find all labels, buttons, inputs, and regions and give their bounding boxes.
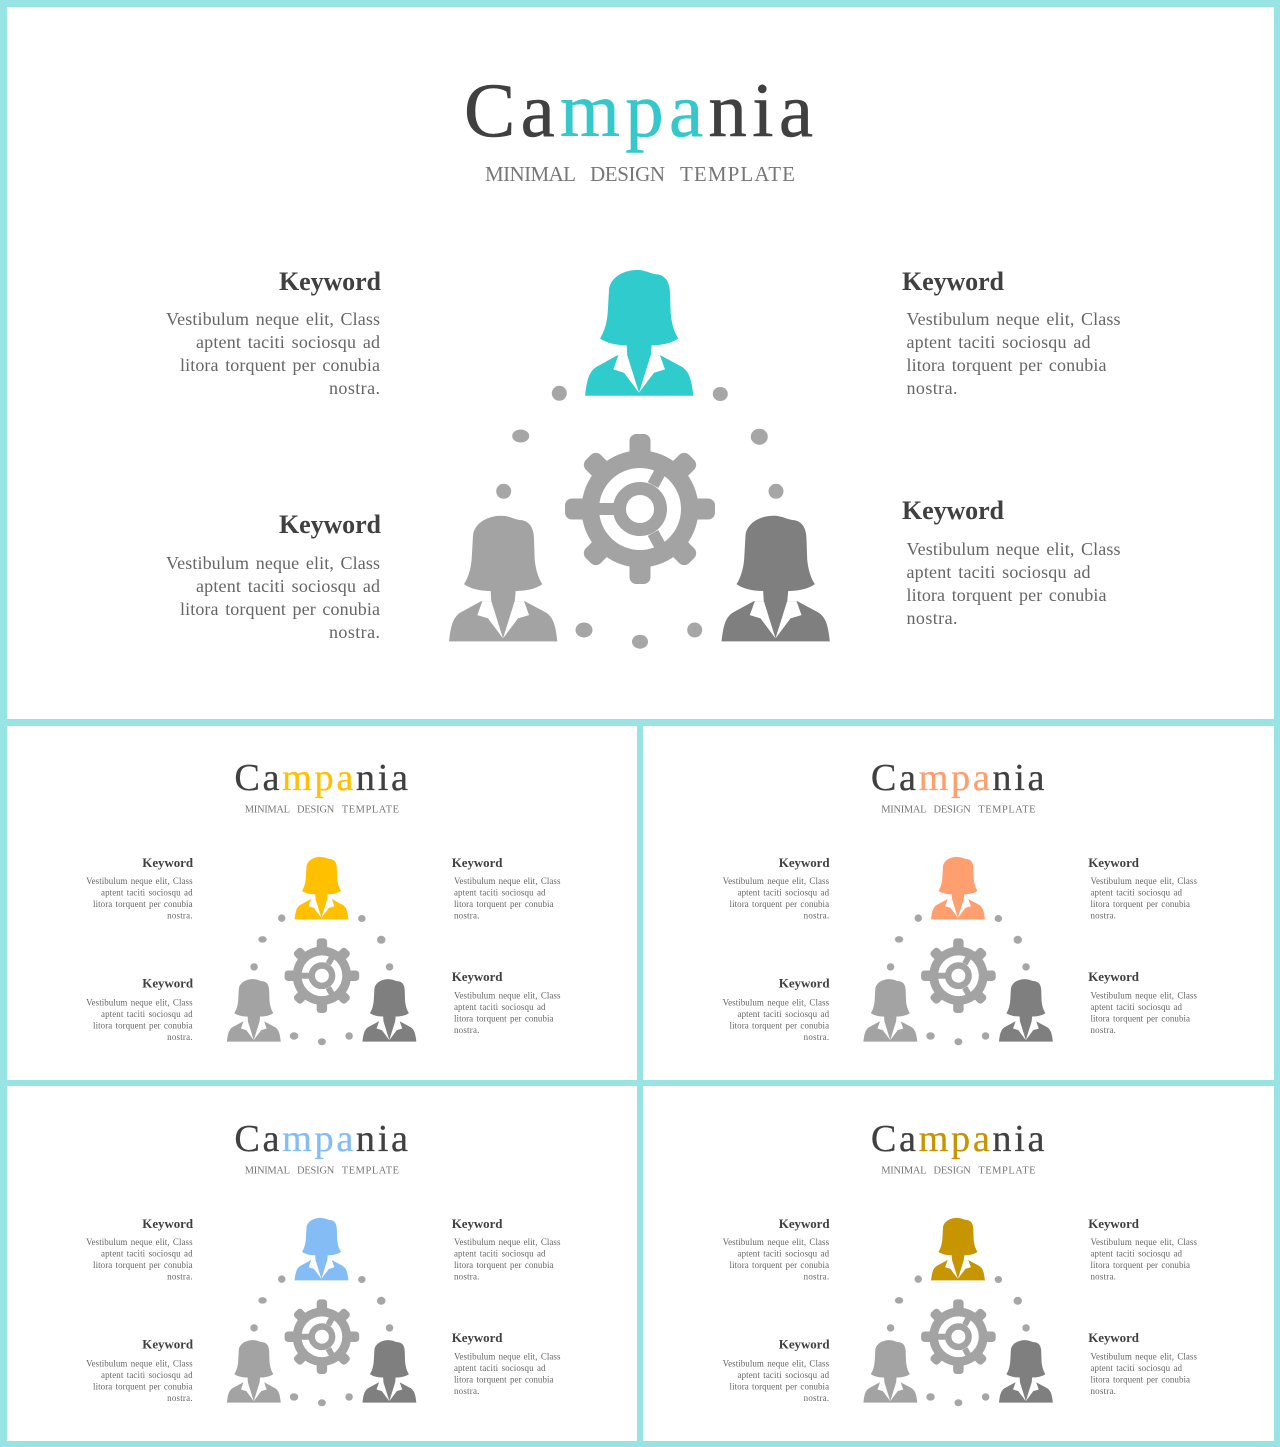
text block: top right: litora torquent per conubia <box>454 1260 554 1270</box>
subtitle: TEMPLATE <box>680 162 795 186</box>
dotted ring <box>250 1275 393 1406</box>
title: Campania <box>871 1118 1044 1160</box>
panel: orange slide <box>643 726 1274 1080</box>
text block: bottom left: nostra. <box>804 1393 829 1403</box>
text block: top left: nostra. <box>167 1272 193 1282</box>
text block: top left: Keyword <box>779 1216 830 1231</box>
text block: top left: litora torquent per conubia <box>730 899 829 909</box>
text block: top right: Vestibulum neque elit, Class <box>454 876 561 886</box>
text block: bottom left: Vestibulum neque elit, Class <box>86 1359 193 1369</box>
text block: top right: Vestibulum neque elit, Class <box>454 1237 561 1247</box>
text block: bottom right: Vestibulum neque elit, Class <box>906 539 1120 559</box>
text block: top left: Vestibulum neque elit, Class <box>86 1237 193 1247</box>
text block: top left <box>723 1216 830 1282</box>
text block: bottom left: litora torquent per conubia <box>93 1020 193 1030</box>
subtitle <box>245 805 399 816</box>
text block: bottom left <box>723 976 830 1042</box>
text block: bottom right: nostra. <box>454 1025 479 1035</box>
text block: top right: Vestibulum neque elit, Class <box>1090 1237 1197 1247</box>
text block: bottom left: Keyword <box>279 510 382 539</box>
text block: bottom left: litora torquent per conubia <box>730 1381 829 1391</box>
dotted ring <box>496 386 784 649</box>
subtitle: DESIGN <box>297 805 335 816</box>
subtitle <box>881 1166 1036 1177</box>
text block: bottom left: Keyword <box>142 976 194 991</box>
panel: blue slide <box>7 1086 637 1441</box>
text block: bottom right: Keyword <box>902 496 1005 525</box>
icon: gear <box>921 938 996 1013</box>
text block: top right: litora torquent per conubia <box>454 899 554 909</box>
text block: top right: nostra. <box>1090 911 1116 921</box>
text block: top right <box>902 267 1120 398</box>
text block: bottom right: litora torquent per conubia <box>906 585 1106 605</box>
text block: bottom left: litora torquent per conubia <box>730 1020 829 1030</box>
text block: top right <box>1088 1216 1197 1282</box>
text block: top right: Keyword <box>1088 855 1140 870</box>
text block: bottom right: aptent taciti sociosqu ad <box>1090 1363 1183 1373</box>
icon: gear <box>285 938 359 1013</box>
subtitle: MINIMAL <box>881 1166 927 1177</box>
text block: top left: litora torquent per conubia <box>93 899 193 909</box>
text block: bottom right <box>1088 969 1197 1035</box>
text block: top left: litora torquent per conubia <box>93 1260 193 1270</box>
panel: main slide <box>7 7 1274 719</box>
panel: gold slide <box>643 1086 1274 1441</box>
text block: top right: litora torquent per conubia <box>1090 899 1190 909</box>
text block: bottom left: nostra. <box>804 1032 829 1042</box>
text block: bottom right: litora torquent per conubia <box>454 1013 554 1023</box>
title: Campania <box>234 1118 408 1160</box>
icon: accent person <box>295 857 348 919</box>
icon: accent person <box>295 1218 348 1280</box>
text block: top right: aptent taciti sociosqu ad <box>454 888 546 898</box>
text block: bottom left: aptent taciti sociosqu ad <box>738 1009 830 1019</box>
icon: accent person <box>931 1218 985 1280</box>
text block: top left: aptent taciti sociosqu ad <box>196 332 380 352</box>
text block: top right: aptent taciti sociosqu ad <box>906 332 1090 352</box>
text block: bottom right: litora torquent per conubia <box>1090 1013 1190 1023</box>
icon: light person <box>863 1340 917 1403</box>
text block: bottom left: Vestibulum neque elit, Class <box>723 998 830 1008</box>
panel: yellow slide <box>7 726 637 1080</box>
text block: top left: aptent taciti sociosqu ad <box>738 888 830 898</box>
text block: top left: Keyword <box>142 855 194 870</box>
text block: bottom right <box>902 496 1120 628</box>
text block: bottom left: aptent taciti sociosqu ad <box>738 1370 830 1380</box>
icon: dark person <box>999 979 1053 1042</box>
text block: top right: Keyword <box>1088 1216 1140 1231</box>
text block: bottom right: Keyword <box>452 1330 503 1345</box>
text block: bottom right: litora torquent per conubia <box>1090 1374 1190 1384</box>
subtitle: DESIGN <box>297 1166 335 1177</box>
text block: top left: nostra. <box>329 378 380 398</box>
text block: bottom left: aptent taciti sociosqu ad <box>101 1370 193 1380</box>
text block: bottom right: nostra. <box>906 608 958 628</box>
subtitle <box>485 162 795 186</box>
icon: dark person <box>362 979 416 1042</box>
text block: bottom left <box>86 1337 194 1403</box>
text block: top right: aptent taciti sociosqu ad <box>1090 1249 1183 1259</box>
title: Campania <box>464 67 813 153</box>
text block: top right: Vestibulum neque elit, Class <box>1090 876 1197 886</box>
icon: gear <box>285 1299 359 1374</box>
text block: top left: litora torquent per conubia <box>180 355 380 375</box>
text block: bottom right <box>1088 1330 1197 1396</box>
text block: top left: Keyword <box>142 1216 194 1231</box>
subtitle: TEMPLATE <box>342 1166 399 1177</box>
text block: top left: Vestibulum neque elit, Class <box>723 1237 830 1247</box>
subtitle: MINIMAL <box>245 1166 290 1177</box>
text block: top left: Keyword <box>779 855 830 870</box>
dotted ring <box>887 914 1030 1045</box>
text block: top right: nostra. <box>906 378 958 398</box>
text block: bottom left <box>86 976 194 1042</box>
text block: bottom right: aptent taciti sociosqu ad <box>906 562 1090 582</box>
text block: top right: Keyword <box>452 1216 503 1231</box>
text block: top right: litora torquent per conubia <box>1090 1260 1190 1270</box>
subtitle: TEMPLATE <box>978 805 1036 816</box>
text block: top right: Keyword <box>902 267 1005 296</box>
text block: bottom right: Keyword <box>1088 1330 1140 1345</box>
text block: bottom right: aptent taciti sociosqu ad <box>1090 1002 1183 1012</box>
text block: bottom left: nostra. <box>167 1393 193 1403</box>
text block: bottom left: Vestibulum neque elit, Class <box>86 998 193 1008</box>
icon: gear <box>565 434 715 584</box>
text block: top right: Keyword <box>452 855 503 870</box>
text block: bottom left: aptent taciti sociosqu ad <box>196 576 380 596</box>
text block: bottom left: nostra. <box>329 622 380 642</box>
icon: light person <box>227 1340 281 1403</box>
text block: top left: aptent taciti sociosqu ad <box>101 888 193 898</box>
text block: top left: litora torquent per conubia <box>730 1260 829 1270</box>
subtitle: MINIMAL <box>485 162 576 186</box>
text block: top left <box>86 855 194 921</box>
text block: top left: Vestibulum neque elit, Class <box>723 876 830 886</box>
text block: top left <box>86 1216 194 1282</box>
text block: bottom right: aptent taciti sociosqu ad <box>454 1363 546 1373</box>
subtitle <box>881 805 1036 816</box>
text block: top left: aptent taciti sociosqu ad <box>101 1249 193 1259</box>
text block: bottom left <box>723 1337 830 1403</box>
text block: top right <box>452 1216 561 1282</box>
title: Campania <box>234 757 408 799</box>
dotted ring <box>887 1275 1030 1406</box>
text block: bottom left: Keyword <box>779 1337 830 1352</box>
text block: bottom right: nostra. <box>454 1386 479 1396</box>
icon: dark person <box>999 1340 1053 1403</box>
text block: top left <box>166 267 382 398</box>
text block: top left: Keyword <box>279 267 382 296</box>
text block: bottom left: litora torquent per conubia <box>180 599 380 619</box>
text block: bottom right <box>452 1330 561 1396</box>
icon: dark person <box>722 516 830 641</box>
title: Campania <box>871 757 1044 799</box>
text block: top left: nostra. <box>167 911 193 921</box>
subtitle <box>245 1166 399 1177</box>
text block: bottom right: Keyword <box>1088 969 1140 984</box>
subtitle: MINIMAL <box>245 805 290 816</box>
text block: top left <box>723 855 830 921</box>
text block: bottom left: litora torquent per conubia <box>93 1381 193 1391</box>
text block: top right: aptent taciti sociosqu ad <box>454 1249 546 1259</box>
icon: light person <box>449 516 557 641</box>
text block: top left: Vestibulum neque elit, Class <box>166 309 380 329</box>
icon: accent person <box>931 857 985 919</box>
text block: bottom left: Keyword <box>142 1337 194 1352</box>
text block: bottom right: Vestibulum neque elit, Class <box>1090 991 1197 1001</box>
text block: top left: nostra. <box>804 1272 829 1282</box>
text block: bottom left: Keyword <box>779 976 830 991</box>
text block: bottom right: Vestibulum neque elit, Class <box>454 991 561 1001</box>
text block: bottom right <box>452 969 561 1035</box>
subtitle: DESIGN <box>934 1166 971 1177</box>
text block: top right <box>1088 855 1197 921</box>
text block: top right: nostra. <box>1090 1272 1116 1282</box>
text block: bottom left: aptent taciti sociosqu ad <box>101 1009 193 1019</box>
subtitle: TEMPLATE <box>342 805 399 816</box>
text block: bottom left: nostra. <box>167 1032 193 1042</box>
text block: bottom right: litora torquent per conubia <box>454 1374 554 1384</box>
subtitle: TEMPLATE <box>978 1166 1036 1177</box>
icon: gear <box>921 1299 996 1374</box>
text block: top right <box>452 855 561 921</box>
text block: bottom right: Vestibulum neque elit, Class <box>454 1352 561 1362</box>
subtitle: DESIGN <box>934 805 971 816</box>
subtitle: MINIMAL <box>881 805 927 816</box>
subtitle: DESIGN <box>590 162 665 186</box>
dotted ring <box>250 914 393 1045</box>
text block: bottom right: aptent taciti sociosqu ad <box>454 1002 546 1012</box>
text block: top left: nostra. <box>804 911 829 921</box>
text block: top right: Vestibulum neque elit, Class <box>906 309 1120 329</box>
text block: top left: Vestibulum neque elit, Class <box>86 876 193 886</box>
icon: light person <box>863 979 917 1042</box>
text block: top right: litora torquent per conubia <box>906 355 1106 375</box>
text block: bottom right: Keyword <box>452 969 503 984</box>
text block: top left: aptent taciti sociosqu ad <box>738 1249 830 1259</box>
text block: top right: nostra. <box>454 911 479 921</box>
text block: bottom left: Vestibulum neque elit, Class <box>723 1359 830 1369</box>
text block: top right: aptent taciti sociosqu ad <box>1090 888 1183 898</box>
text block: bottom left <box>166 510 382 642</box>
icon: accent person <box>585 270 693 396</box>
text block: bottom left: Vestibulum neque elit, Class <box>166 553 380 573</box>
text block: top right: nostra. <box>454 1272 479 1282</box>
text block: bottom right: Vestibulum neque elit, Class <box>1090 1352 1197 1362</box>
icon: light person <box>227 979 281 1042</box>
icon: dark person <box>362 1340 416 1403</box>
text block: bottom right: nostra. <box>1090 1025 1116 1035</box>
text block: bottom right: nostra. <box>1090 1386 1116 1396</box>
